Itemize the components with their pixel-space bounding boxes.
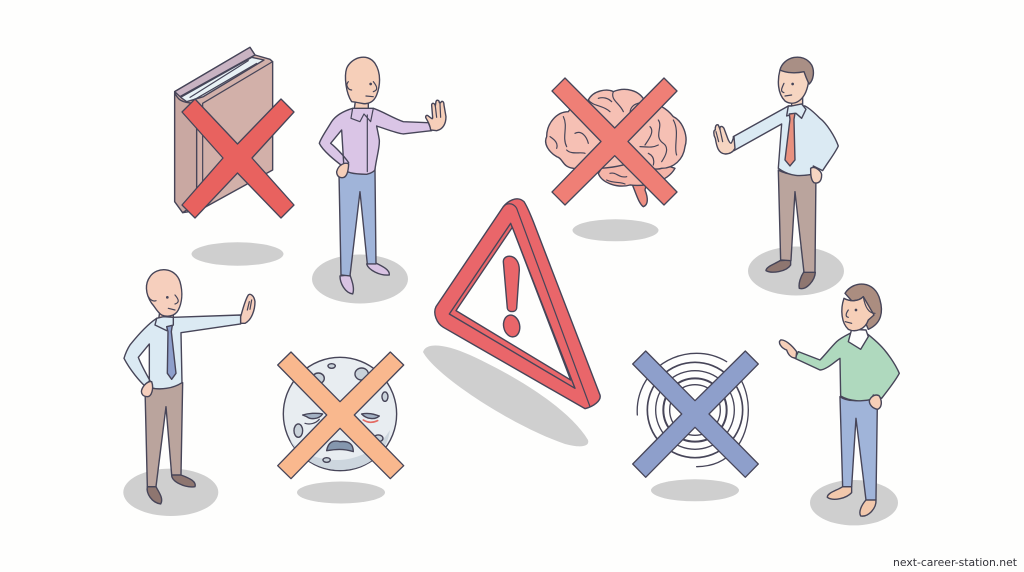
panel: moon crossed out <box>278 352 404 504</box>
tie <box>785 113 795 166</box>
icon: moon <box>283 357 397 471</box>
figure: person 1 <box>319 57 446 294</box>
icon: blue cross <box>633 351 758 477</box>
shadow: person 3 <box>123 469 218 516</box>
tie <box>167 325 176 379</box>
exclamation mark <box>502 256 522 338</box>
shadow: book <box>192 242 284 266</box>
website credit: next-career-station.net <box>893 557 1017 569</box>
icon: peach cross <box>278 352 404 479</box>
panel: man with salmon tie <box>714 57 844 296</box>
panel: book crossed out <box>175 47 294 266</box>
icon: spiral rings <box>637 353 748 467</box>
shadow: spiral <box>651 479 739 501</box>
moon face <box>303 413 379 452</box>
figure: person 4 <box>779 284 899 516</box>
hand <box>779 340 797 358</box>
shadow: person 1 <box>312 254 408 304</box>
figure: person 2 <box>714 57 838 289</box>
hand <box>426 100 446 131</box>
hand <box>714 125 735 154</box>
hair back <box>845 284 881 329</box>
hand <box>241 294 255 323</box>
icon: warning triangle <box>435 199 600 409</box>
shadow: brain <box>572 219 658 241</box>
panel: spiral crossed out <box>633 351 758 501</box>
icon: brain <box>546 89 686 207</box>
shadow: warning triangle <box>423 346 588 446</box>
panel: person with purple shirt <box>312 57 446 304</box>
shadow: person 2 <box>748 246 844 296</box>
icon: red cross <box>182 99 294 218</box>
shadow: person 4 <box>810 480 898 525</box>
panel: man with blue tie <box>123 270 255 516</box>
panel: woman in green sweater <box>779 284 899 525</box>
figure: person 3 <box>124 270 255 504</box>
icon: coral cross <box>552 78 677 205</box>
panel: brain crossed out <box>546 78 686 241</box>
shadow: moon <box>297 482 385 504</box>
icon: book <box>175 47 273 213</box>
